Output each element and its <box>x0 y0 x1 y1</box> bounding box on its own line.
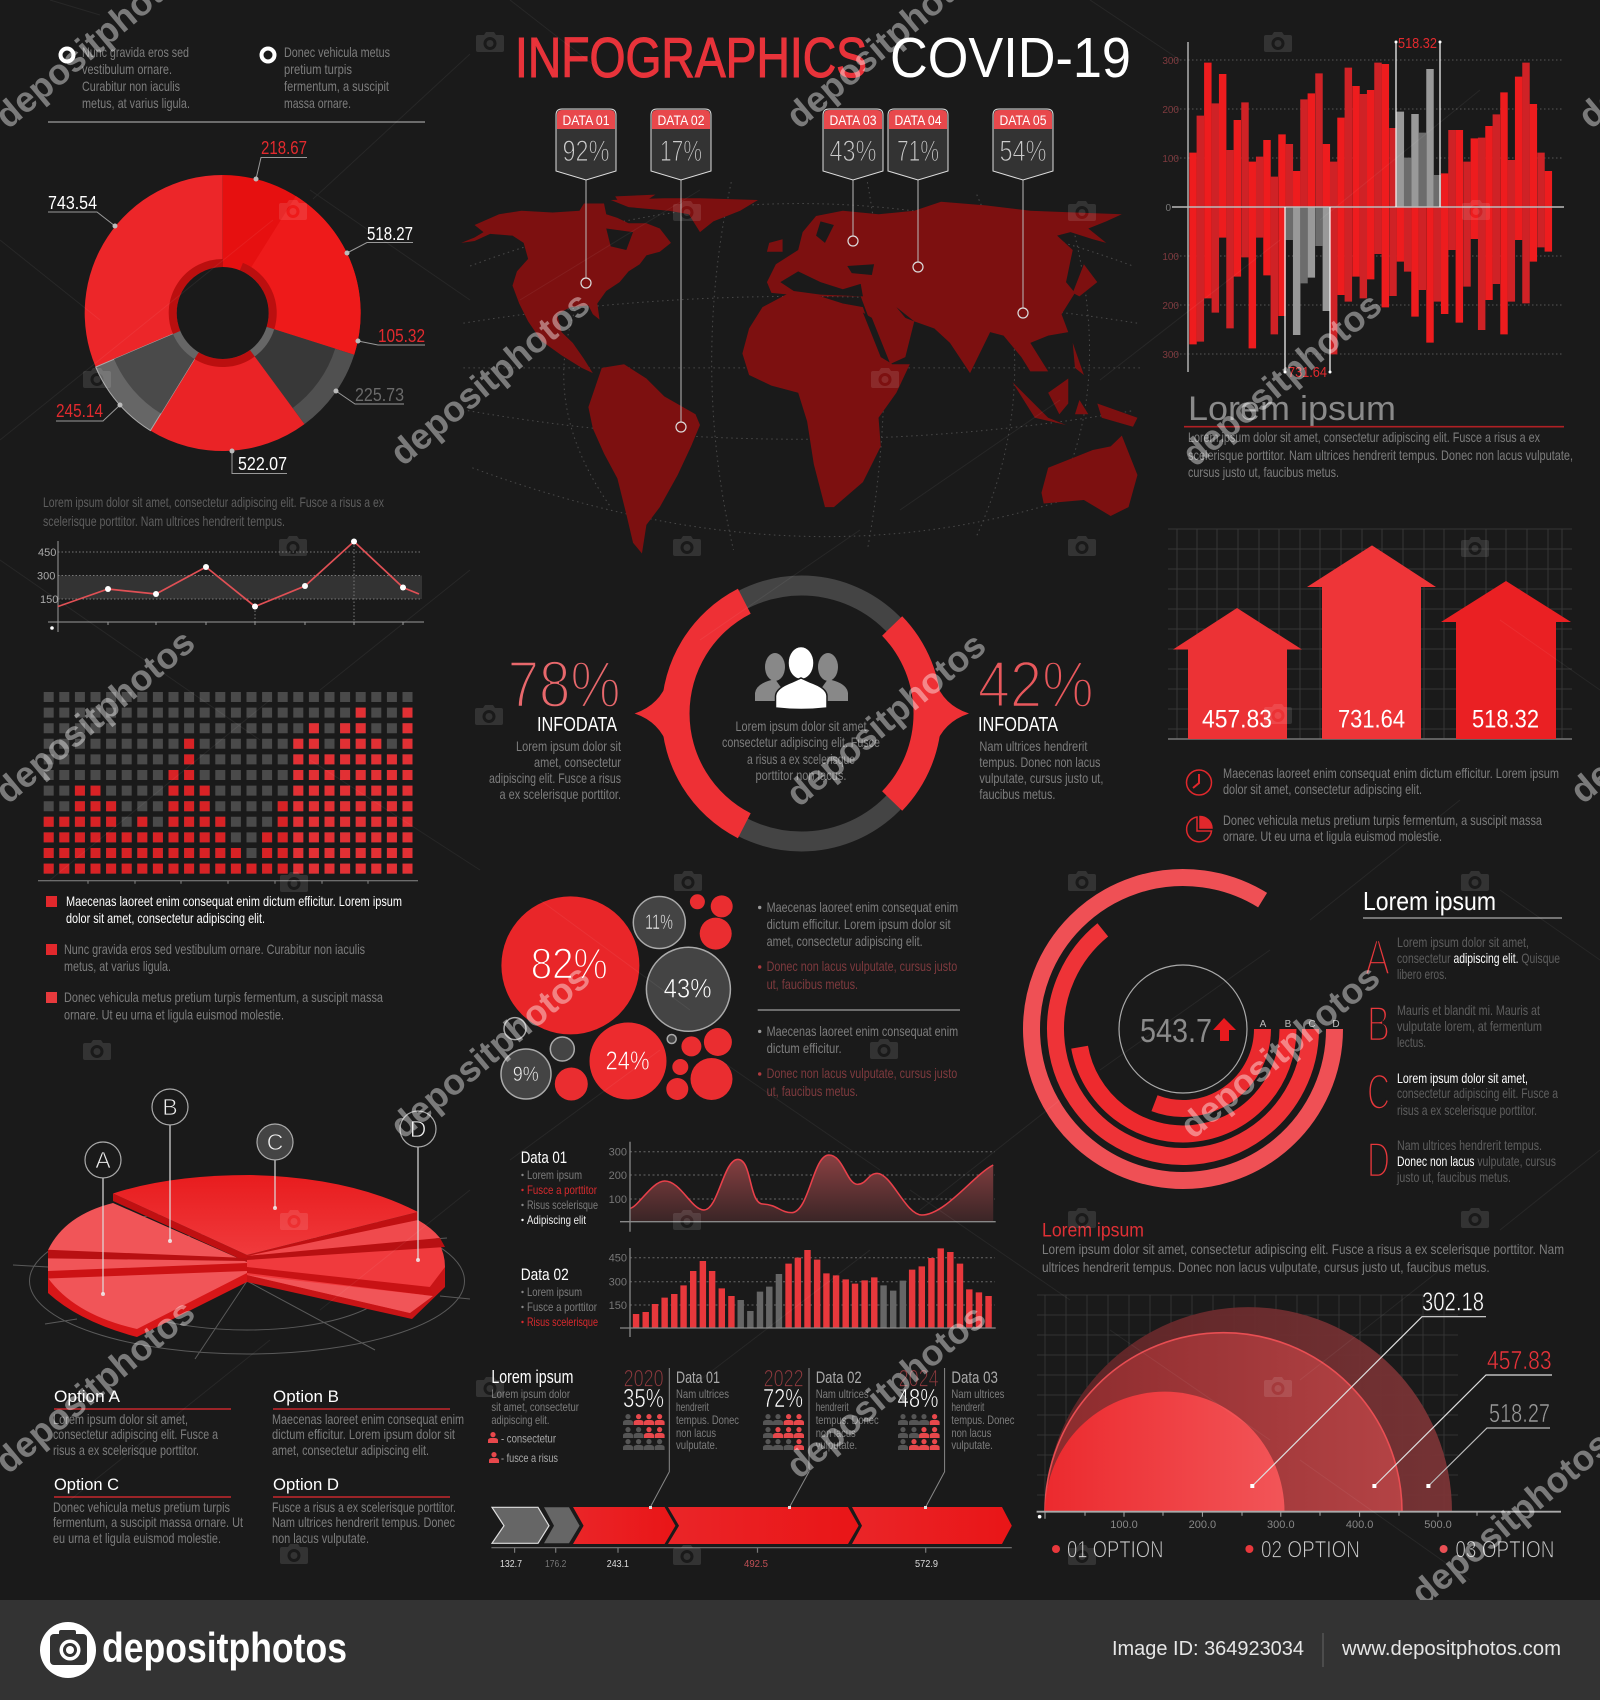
chevron timeline: 176.2 <box>545 1558 567 1570</box>
timeline column: 2022: 2022 <box>764 1366 804 1393</box>
text block: options A to D: non lacus vulputate. <box>272 1530 369 1546</box>
radial arc chart <box>1032 878 1340 1181</box>
text block: A to D legend: Lorem ipsum dolor sit amet, <box>1397 1070 1528 1086</box>
diverging bar chart: 200 <box>1162 105 1179 116</box>
ring text <box>722 718 880 783</box>
text block: lorem ipsum with legend: Lorem ipsum dolor <box>491 1387 570 1401</box>
text block: bubble notes: amet, consectetur adipiscing elit. <box>767 933 923 949</box>
text block: A to D legend: C <box>1367 1064 1390 1120</box>
text block: A to D legend: D <box>1367 1132 1390 1188</box>
pie callouts A B C D: A <box>95 1147 111 1173</box>
donut labels <box>48 138 425 474</box>
semicircle callouts: 302.18 <box>1422 1287 1484 1317</box>
world map <box>461 182 1142 554</box>
donut labels: 518.27 <box>367 224 413 244</box>
semicircle callouts: 518.27 <box>1489 1398 1550 1428</box>
text block: top left notes: vestibulum ornare. <box>82 61 172 77</box>
pin: data 02 <box>651 109 711 432</box>
bubble chart: 24% <box>606 1046 650 1076</box>
timeline column: 2024: non lacus <box>951 1426 991 1440</box>
text block: bubble notes: Donec non lacus vulputate, cursus justo <box>767 958 957 974</box>
bubble chart: 11% <box>645 911 673 934</box>
chevron timeline: 492.5 <box>744 1558 768 1570</box>
area chart: 100 <box>609 1194 627 1206</box>
legend: dot matrix: Maecenas laoreet enim consequat enim dictum efficitur. Lorem ipsum <box>66 893 402 909</box>
donut labels: 105.32 <box>378 326 425 346</box>
semicircle chart: 500.0 <box>1424 1519 1452 1531</box>
data tag pins <box>556 109 1053 432</box>
pin: data 03: DATA 03 <box>830 112 877 128</box>
pin: data 03: 43% <box>830 135 876 168</box>
text block: A to D legend: Donec non lacus vulputate, cursus <box>1397 1153 1556 1169</box>
donut labels: 522.07 <box>238 454 287 474</box>
ring text: consectetur adipiscing elit. Fusce <box>722 734 880 750</box>
text block: options A to D: Option C <box>54 1475 119 1494</box>
timeline column: 2024: Data 03 <box>951 1368 998 1387</box>
text block: lorem ipsum with legend <box>488 1367 579 1465</box>
text block: top left notes: Curabitur non iaculis <box>82 78 180 94</box>
watermark: depositphotos text: depositphotos <box>778 624 993 814</box>
arrow: 518.32 <box>1441 581 1571 739</box>
text block: options A to D: Fusce a risus a ex scelerisque porttitor. <box>272 1499 456 1515</box>
text block: bubble notes: dictum efficitur. Lorem ipsum dolor sit <box>767 916 951 932</box>
data 02 list: Risus scelerisque <box>527 1315 598 1329</box>
text block: lorem ipsum bottom right <box>1042 1221 1564 1275</box>
watermark: depositphotos text: depositphotos <box>1172 956 1387 1146</box>
title: COVID-19 <box>890 26 1131 90</box>
line chart: 450 <box>38 547 56 559</box>
pin: data 02: 17% <box>660 135 702 168</box>
text block: bubble notes: Maecenas laoreet enim consequat enim <box>767 1023 958 1039</box>
column chart: 300 <box>609 1277 627 1289</box>
chevron timeline: 132.7 <box>500 1558 522 1570</box>
text block: bubble notes: dictum efficitur. <box>767 1040 842 1056</box>
icon: up arrow <box>1213 1018 1236 1041</box>
text block: options A to D: risus a ex scelerisque porttitor. <box>53 1442 199 1458</box>
ring text: porttitor non lacus. <box>756 767 846 783</box>
text block: options A to D: Option D <box>273 1475 339 1494</box>
text block: options A to D: amet, consectetur adipiscing elit. <box>272 1442 429 1458</box>
text block: bubble notes: Donec non lacus vulputate, cursus justo <box>767 1065 957 1081</box>
donut labels: 743.54 <box>48 193 97 213</box>
text block: options A to D: Option B <box>273 1387 339 1406</box>
text block: A to D legend: Nam ultrices hendrerit tempus. <box>1397 1137 1542 1153</box>
timeline column: 2024: tempus. Donec <box>951 1413 1014 1427</box>
stat: 78%: a ex scelerisque porttitor. <box>500 786 621 802</box>
data 02 list: Fusce a porttitor <box>527 1300 597 1314</box>
donut labels: 245.14 <box>56 401 103 421</box>
legend: dot matrix <box>46 893 402 1022</box>
text block: options A to D: dictum efficitur. Lorem ipsum dolor sit <box>272 1426 455 1442</box>
arrow: 731.64: 731.64 <box>1338 706 1405 734</box>
timeline column: 2024: 2024 <box>899 1366 939 1393</box>
timeline column: 2024: 48% <box>898 1383 938 1413</box>
radial arc chart: C <box>1308 1019 1316 1030</box>
icon: depositphotos logo <box>40 1622 96 1678</box>
column chart <box>609 1248 996 1337</box>
timeline column: 2022: Nam ultrices <box>816 1387 869 1401</box>
footer bar: www.depositphotos.com <box>1341 1638 1561 1660</box>
column chart: 150 <box>609 1300 627 1312</box>
pin: data 03 <box>823 109 883 246</box>
pin: data 04: DATA 04 <box>894 112 942 128</box>
data 02 list: Lorem ipsum <box>527 1285 582 1299</box>
text block: A to D legend: lectus. <box>1397 1034 1426 1050</box>
watermark: depositphotos text: depositphotos <box>382 956 597 1146</box>
chevron timeline <box>491 1506 1012 1570</box>
pin: data 04 <box>888 109 948 272</box>
stat: 78%: amet, consectetur <box>534 754 621 770</box>
legend: dot matrix: Donec vehicula metus pretium turpis fermentum, a suscipit massa <box>64 989 383 1005</box>
diverging bar chart: 200 <box>1162 301 1179 312</box>
dot matrix chart <box>38 692 418 884</box>
text block: options A to D: fermentum, a suscipit massa ornare. Ut <box>53 1514 243 1530</box>
stat: 78%: INFODATA <box>537 714 618 736</box>
text block: lorem ipsum bottom right: Lorem ipsum <box>1042 1221 1144 1242</box>
text block: A to D legend: risus a ex scelerisque porttitor. <box>1397 1102 1537 1118</box>
watermark: depositphotos text: depositphotos <box>778 1296 993 1486</box>
footer bar: Image ID: 364923034 <box>1112 1638 1304 1660</box>
text block: bubble notes: Maecenas laoreet enim consequat enim <box>767 899 958 915</box>
text block: line chart intro: Lorem ipsum dolor sit amet, consectetur adipiscing elit. Fusce a risus a ex <box>43 494 384 510</box>
stat: 42% <box>978 647 1103 802</box>
semicircle chart: 400.0 <box>1346 1519 1373 1531</box>
data 01 list: Lorem ipsum <box>527 1168 582 1182</box>
semicircle chart: 100.0 <box>1110 1519 1138 1531</box>
pin: data 04: 71% <box>897 135 939 168</box>
semicircle chart <box>1037 1287 1561 1531</box>
donut labels: 225.73 <box>355 385 404 405</box>
stat: 42%: tempus. Donec non lacus <box>979 754 1100 770</box>
text block: lorem ipsum with legend: adipiscing elit. <box>491 1413 549 1427</box>
text block: top left notes: Donec vehicula metus <box>284 44 390 60</box>
options legend: 02 OPTION <box>1261 1537 1360 1564</box>
text block: line chart intro: scelerisque porttitor. Nam ultrices hendrerit tempus. <box>43 513 285 529</box>
timeline column: 2020: vulputate. <box>676 1438 718 1452</box>
diverging bar chart: 300 <box>1162 350 1179 361</box>
text block: A to D legend <box>1363 886 1562 1188</box>
semicircle callouts <box>1250 1287 1552 1488</box>
legend: dot matrix: ornare. Ut eu urna et ligula euismod molestie. <box>64 1006 284 1022</box>
text block: lorem ipsum with legend: - fusce a risus <box>501 1451 558 1465</box>
timeline column: 2020: non lacus <box>676 1426 716 1440</box>
icon notes under arrow chart: dolor sit amet, consectetur adipiscing elit. <box>1223 781 1422 797</box>
bubble chart <box>501 894 733 1100</box>
bubble chart: 43% <box>664 974 712 1004</box>
text block: top left notes: massa ornare. <box>284 95 351 111</box>
data 01 list: Risus scelerisque <box>527 1198 598 1212</box>
stat: 42%: 42% <box>978 647 1094 721</box>
text block: top left notes: pretium turpis <box>284 61 352 77</box>
map continents <box>461 195 1137 554</box>
text block: options A to D: Maecenas laoreet enim consequat enim <box>272 1411 464 1427</box>
timeline column: 2020: hendrerit <box>676 1400 709 1414</box>
text block: A to D legend: B <box>1367 996 1390 1052</box>
text block: options A to D: eu urna et ligula euismod molestie. <box>53 1530 221 1546</box>
pie callouts A B C D: C <box>267 1129 283 1155</box>
central ring with people <box>634 586 969 842</box>
timeline column: 2022: hendrerit <box>816 1400 849 1414</box>
pie callouts A B C D: B <box>162 1094 178 1120</box>
arrow: 731.64 <box>1307 545 1436 739</box>
arrow: 518.32: 518.32 <box>1472 706 1539 734</box>
text block: top left notes <box>48 44 425 122</box>
timeline column: 2024: vulputate. <box>951 1438 993 1452</box>
diverging bar chart: 300 <box>1162 56 1179 67</box>
text block: lorem ipsum with legend: Lorem ipsum <box>491 1367 573 1387</box>
data 01 list: Data 01 <box>521 1148 567 1167</box>
text block: A to D legend: Mauris et blandit mi. Mauris at <box>1397 1002 1540 1018</box>
diverging bar chart: 518.32 <box>1398 35 1437 52</box>
ring text: a risus a ex scelerisque <box>747 751 855 767</box>
footer bar <box>0 1600 1600 1700</box>
text block: options A to D: Lorem ipsum dolor sit amet, <box>53 1411 188 1427</box>
icon: clock <box>1186 770 1212 795</box>
text block: A to D legend: A <box>1365 930 1390 986</box>
stat: 42%: Nam ultrices hendrerit <box>979 738 1087 754</box>
pie callouts A B C D <box>85 1089 436 1296</box>
text block: lorem ipsum with legend: - consectetur <box>501 1432 556 1446</box>
timeline column: 2020 <box>623 1366 739 1507</box>
text block: A to D legend: vulputate lorem, at fermentum <box>1397 1018 1542 1034</box>
pin: data 01 <box>556 109 616 288</box>
text block: top left notes: fermentum, a suscipit <box>284 78 389 94</box>
donut chart <box>48 138 425 474</box>
data 02 list <box>521 1265 598 1329</box>
data 01 list: Fusce a porttitor <box>527 1183 597 1197</box>
legend: dot matrix: metus, at varius ligula. <box>64 958 171 974</box>
timeline column: 2024: hendrerit <box>951 1400 985 1414</box>
text block: bubble notes <box>758 899 960 1099</box>
text block: A to D legend: justo ut, faucibus metus. <box>1396 1169 1511 1185</box>
text block: lorem ipsum with legend: sit amet, consectetur <box>491 1400 579 1414</box>
semicircle chart: 300.0 <box>1267 1519 1295 1531</box>
column chart: 450 <box>609 1253 627 1265</box>
pin: data 05 <box>993 109 1053 318</box>
donut labels: 218.67 <box>261 138 307 158</box>
timeline column: 2020: Data 01 <box>676 1368 720 1387</box>
timeline column: 2022: Data 02 <box>816 1368 862 1387</box>
arrow: 457.83: 457.83 <box>1202 706 1272 734</box>
area chart: 200 <box>609 1170 627 1182</box>
text block: lorem ipsum top right: Lorem ipsum <box>1188 390 1396 428</box>
bubble chart: 82% <box>531 940 608 989</box>
radial arc chart: B <box>1285 1019 1292 1030</box>
pin: data 01: DATA 01 <box>562 112 610 128</box>
diverging bar chart: 731.64 <box>1288 364 1327 381</box>
text block: lorem ipsum top right: cursus justo ut, faucibus metus. <box>1188 464 1339 480</box>
pie callouts A B C D: D <box>410 1116 426 1142</box>
diverging bar chart: 100 <box>1162 154 1179 165</box>
timeline column: 2020: Nam ultrices <box>676 1387 729 1401</box>
text block: options A to D <box>53 1387 464 1546</box>
stat: 78%: adipiscing elit. Fusce a risus <box>489 770 621 786</box>
text block: A to D legend: Lorem ipsum dolor sit amet, <box>1397 934 1529 950</box>
semicircle chart: 200.0 <box>1189 1519 1216 1531</box>
timeline column: 2022: non lacus <box>816 1426 856 1440</box>
text block: options A to D: consectetur adipiscing elit. Fusce a <box>53 1426 218 1442</box>
icon: pie <box>1187 816 1212 842</box>
title: INFOGRAPHICS <box>515 26 867 90</box>
stat: 78%: Lorem ipsum dolor sit <box>516 738 621 754</box>
legend: dot matrix: dolor sit amet, consectetur adipiscing elit. <box>66 910 265 926</box>
watermark camera marks <box>83 32 1490 1565</box>
text block: top left notes: metus, at varius ligula. <box>82 95 190 111</box>
pin: data 05: 54% <box>1000 135 1046 168</box>
timeline column: 2022: 72% <box>763 1383 803 1413</box>
timeline column: 2020: 2020 <box>624 1366 664 1393</box>
stat: 78%: 78% <box>508 647 621 721</box>
options legend <box>1052 1537 1554 1564</box>
icon notes under arrow chart: ornare. Ut eu urna et ligula euismod molestie. <box>1223 828 1442 844</box>
semicircle callouts: 457.83 <box>1487 1345 1552 1375</box>
timeline column: 2020: 35% <box>623 1383 664 1413</box>
timeline column: 2024 <box>898 1366 1014 1507</box>
stat: 42%: vulputate, cursus justo ut, <box>979 770 1103 786</box>
text block: A to D legend: Lorem ipsum <box>1363 886 1496 916</box>
radial arc chart: A <box>1260 1019 1267 1030</box>
pin: data 02: DATA 02 <box>658 112 705 128</box>
options legend: 03 OPTION <box>1455 1537 1554 1564</box>
footer bar: depositphotos <box>102 1624 347 1671</box>
text block: bubble notes: ut, faucibus metus. <box>767 976 858 992</box>
line chart <box>37 538 424 632</box>
radial arc chart: 543.7 <box>1140 1012 1212 1049</box>
stat: 42%: INFODATA <box>978 714 1059 736</box>
options legend: 01 OPTION <box>1067 1537 1164 1564</box>
timeline column: 2022 <box>763 1366 879 1507</box>
timeline column: 2024: Nam ultrices <box>951 1387 1004 1401</box>
text block: bubble notes: ut, faucibus metus. <box>767 1083 858 1099</box>
3D pie chart <box>13 1089 470 1359</box>
arrow bar chart <box>1168 529 1572 739</box>
text block: A to D legend: consectetur adipiscing elit. Quisque <box>1397 950 1560 966</box>
text block: lorem ipsum top right <box>1184 390 1573 480</box>
text block: A to D legend: libero eros. <box>1397 966 1447 982</box>
area chart: 300 <box>609 1147 627 1159</box>
data 01 list <box>521 1148 598 1227</box>
ring text: Lorem ipsum dolor sit amet <box>736 718 867 734</box>
legend: dot matrix: Nunc gravida eros sed vestibulum ornare. Curabitur non iaculis <box>64 941 365 957</box>
stat: 42%: faucibus metus. <box>979 786 1055 802</box>
watermark: depositphotos text: depositphotos <box>382 283 597 473</box>
icon notes under arrow chart <box>1186 765 1559 844</box>
line chart: 150 <box>40 594 58 606</box>
text block: lorem ipsum bottom right: ultrices hendrerit tempus. Donec non lacus vulputate, cursus justo ut, faucibus metus. <box>1042 1259 1490 1275</box>
bubble chart: 9% <box>513 1063 539 1086</box>
pin: data 01: 92% <box>562 135 610 168</box>
area chart <box>609 1142 996 1232</box>
timeline column: 2022: tempus. Donec <box>816 1413 879 1427</box>
line chart: 300 <box>37 570 55 582</box>
text block: line chart intro <box>43 494 384 529</box>
diverging bar chart: 0 <box>1165 203 1171 214</box>
icon: people <box>755 646 848 710</box>
diverging bar chart <box>1162 35 1564 381</box>
text block: options A to D: Nam ultrices hendrerit tempus. Donec <box>272 1514 455 1530</box>
timeline column: 2020: tempus. Donec <box>676 1413 739 1427</box>
data 01 list: Adipiscing elit <box>527 1213 587 1227</box>
text block: top left notes: Nunc gravida eros sed <box>82 44 189 60</box>
data 02 list: Data 02 <box>521 1265 569 1284</box>
text block: options A to D: Donec vehicula metus pretium turpis <box>53 1499 230 1515</box>
diverging bar chart: 100 <box>1162 252 1179 263</box>
chevron timeline: 572.9 <box>915 1558 938 1570</box>
stat: 78% <box>489 647 621 802</box>
timeline column: 2022: vulputate. <box>816 1438 857 1452</box>
chevron timeline: 243.1 <box>607 1558 629 1570</box>
pin: data 05: DATA 05 <box>1000 112 1047 128</box>
text block: options A to D: Option A <box>54 1387 121 1406</box>
watermark: depositphotos text: depositphotos <box>1174 284 1389 474</box>
arrow: 457.83 <box>1173 608 1302 739</box>
radial arc chart: D <box>1332 1019 1340 1030</box>
